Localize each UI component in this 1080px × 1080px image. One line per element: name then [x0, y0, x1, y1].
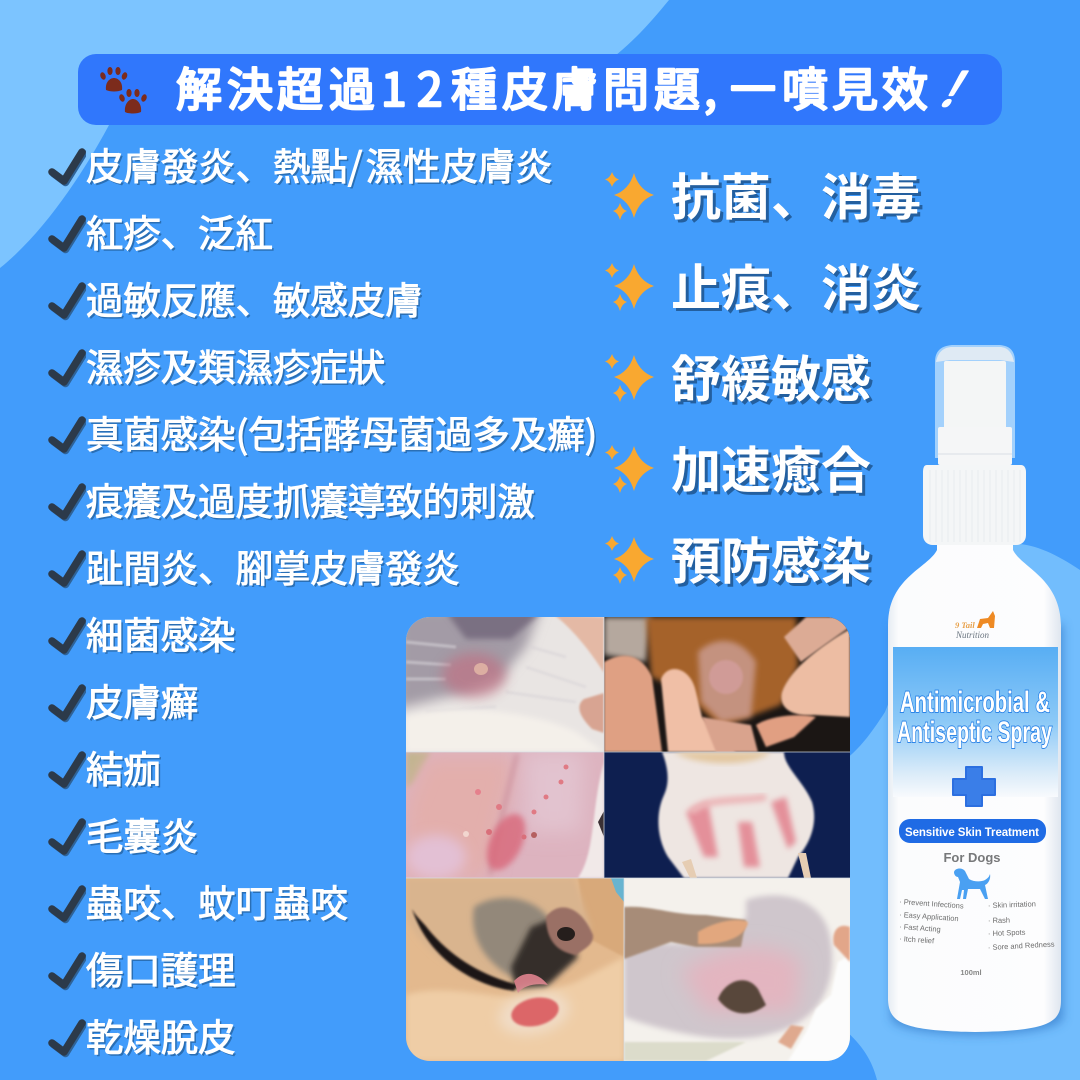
label: feature list: · Rash [988, 916, 1010, 925]
label: brand: Nutrition [955, 630, 990, 640]
list item: 真菌感染(包括酵母菌過多及癬) [86, 405, 597, 459]
benefit item: 抗菌、消毒 [671, 158, 921, 230]
transparent cap [935, 345, 1015, 465]
label: feature list: · Prevent Infections [899, 897, 964, 911]
list item [48, 740, 161, 794]
photo: red paw on navy background [604, 752, 850, 878]
benefit item: 加速癒合 [671, 431, 871, 503]
checklist: skin problems [48, 137, 597, 1062]
photo collage: dog skin conditions [406, 617, 850, 1061]
icon: paw prints [99, 67, 148, 114]
list item: 紅疹、泛紅 [86, 204, 273, 258]
label: feature list: · Easy Application [899, 910, 959, 923]
label: product name [897, 686, 1052, 749]
bottle shadow [891, 624, 1063, 1035]
label: treatment pill: Sensitive Skin Treatment [905, 827, 1039, 839]
photo: irritated skin on white fur [406, 617, 604, 752]
photo: interdigital cyst on paw [604, 617, 850, 752]
label: treatment pill [899, 819, 1046, 843]
list item: 皮膚癬 [86, 673, 198, 727]
label: brand [955, 611, 995, 640]
benefit item: 舒緩敏感 [671, 340, 871, 412]
icon: dog silhouette [954, 868, 990, 899]
label: feature list: · Skin irritation [988, 899, 1036, 910]
list item: 趾間炎、腳掌皮膚發炎 [86, 539, 460, 593]
list item: 結痂 [86, 740, 161, 794]
title text: ！ [914, 54, 998, 120]
screw collar [923, 465, 1026, 545]
list item: 傷口護理 [86, 941, 236, 995]
product: spray bottle [886, 345, 1068, 1040]
title text: 解決超過12種皮膚問題,一噴見效 [176, 54, 928, 120]
benefit item: 預防感染 [671, 522, 871, 594]
list item: 蟲咬、蚊叮蟲咬 [86, 874, 348, 928]
list item: 皮膚發炎、熱點 濕性皮膚炎 [86, 137, 553, 191]
label: feature list: · Itch relief [899, 934, 935, 946]
bottle body [888, 540, 1061, 1032]
title banner [78, 54, 1002, 125]
list item: 過敏反應、敏感皮膚 [86, 271, 423, 325]
label: brand: 9 Tail [955, 620, 975, 630]
list item: 痕癢及過度抓癢導致的刺激 [86, 472, 535, 526]
shared symbols [0, 0, 4, 4]
label: feature list [899, 897, 1055, 952]
photo: dog muzzle licking a hot spot [406, 878, 624, 1061]
label: feature list: · Fast Acting [899, 922, 941, 934]
photo: red bumps on belly [406, 752, 604, 879]
list item: 濕疹及類濕疹症狀 [86, 338, 385, 392]
label: for dogs: For Dogs [943, 850, 1001, 865]
photo: crusted wound on pale leg [624, 878, 850, 1061]
list item: / [348, 137, 362, 191]
benefit item: 止痕、消炎 [671, 249, 921, 321]
label: blue panel [893, 647, 1058, 797]
list item: 細菌感染 [86, 606, 236, 660]
label: cross icon [953, 767, 995, 806]
photo dividers [406, 617, 850, 1061]
benefits list [605, 158, 922, 594]
label: volume: 100ml [960, 968, 982, 977]
list item: 乾燥脫皮 [86, 1008, 236, 1062]
list item: 毛囊炎 [86, 807, 198, 861]
label: feature list: · Hot Spots [988, 928, 1026, 938]
label: feature list: · Sore and Redness [988, 940, 1055, 952]
